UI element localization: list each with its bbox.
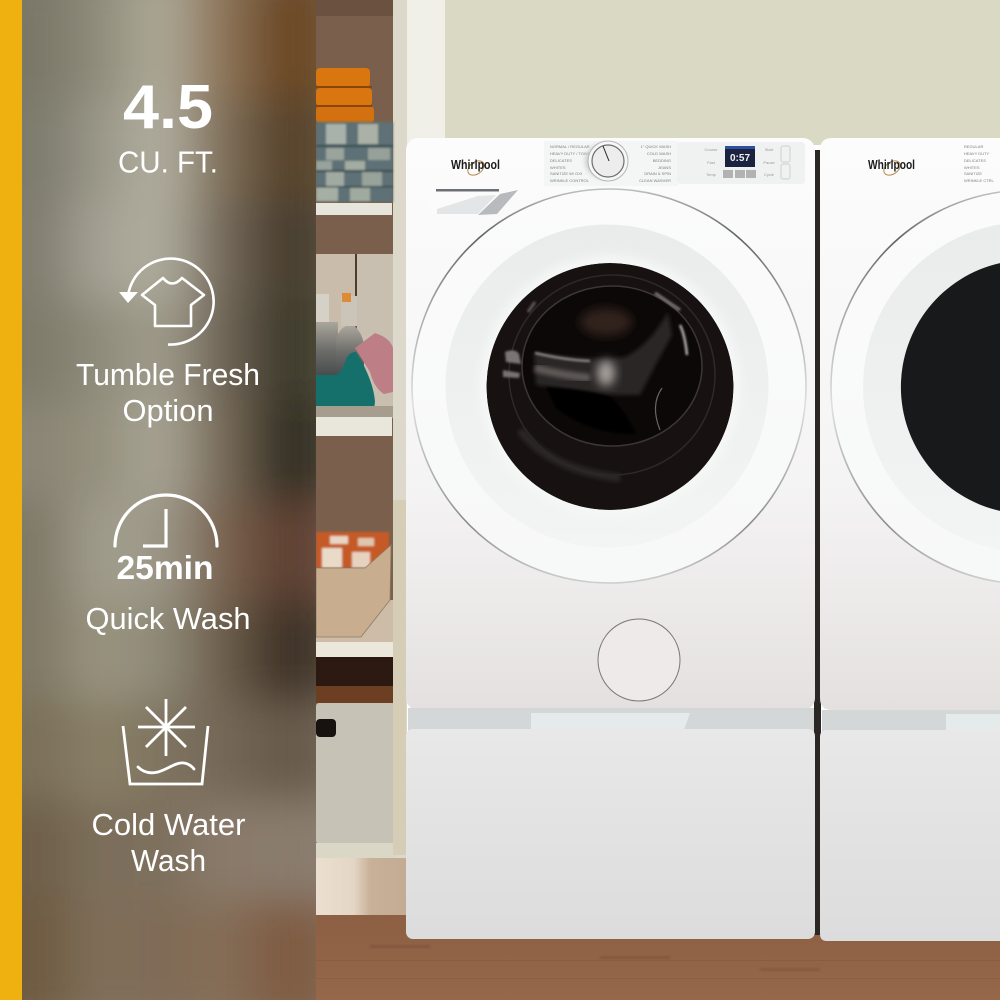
option labels: Temp [706,172,717,177]
washer body [406,138,815,710]
orange towels [316,68,374,123]
beige bin [316,545,391,637]
dark gap [316,657,393,703]
wood floor [316,915,1000,1000]
icon: half clock [115,495,217,546]
shelf two [316,406,393,418]
door glass and drum [486,263,734,510]
icon value: 25min [116,549,214,586]
icon: shirt with rotating arrow [119,259,214,345]
capacity value: 4.5 [123,73,213,142]
option labels: Pause [763,160,775,165]
shelf three top surface [316,600,393,642]
yellow stripe [0,0,22,1000]
option labels [705,147,775,177]
orange patterned towels [316,532,389,568]
power buttons [781,146,790,179]
wall [445,0,1000,145]
washer [406,138,815,710]
option buttons [723,170,756,178]
dryer cycle labels [964,144,995,183]
capacity unit: CU. FT. [118,144,218,180]
teal basket [316,352,375,417]
whirlpool logo: Whirlpool [451,158,500,172]
cycle labels left: HEAVY DUTY / TOWELS [550,151,596,156]
cycle dial [585,141,628,181]
washer pedestal [406,708,815,939]
whirlpool logo [451,158,500,178]
pink cloth [355,333,393,394]
door trim [393,0,445,145]
shelf three [316,642,393,657]
dryer body [820,138,1000,710]
cycle labels right: BEDDING [653,158,671,163]
feature: tumble fresh: Option [122,393,214,428]
frosted feature panel [22,0,316,1000]
dryer cycle labels: SANITIZE [964,171,982,176]
cycle labels right: COLD WASH [647,151,671,156]
dryer logo [868,158,915,178]
cycle labels right: 1" QUICK WASH [641,144,671,149]
shelf one [316,203,392,215]
shelf four [316,843,396,858]
dryer cycle labels: DELICATES [964,158,986,163]
cycle labels right: DRAIN & SPIN [644,171,671,176]
cycle labels left: NORMAL / REGULAR [550,144,590,149]
cycle labels left: WRINKLE CONTROL [550,178,590,183]
control panel [451,141,805,186]
dryer cycle labels: HEAVY DUTY [964,151,990,156]
feature: cold water wash: Wash [131,843,206,878]
dryer door [831,192,1000,582]
dryer logo: Whirlpool [868,158,915,172]
dryer cycle labels: REGULAR [964,144,983,149]
detergent drawer [420,187,518,215]
dryer cycle labels: WHITES [964,165,980,170]
feature: tumble fresh [76,259,260,428]
shelving unit [316,0,406,915]
cycle labels right: JEANS [658,165,671,170]
gap between machines [814,150,821,935]
dryer cycle labels: WRINKLE CTRL [964,178,995,183]
option labels: Course [705,147,718,152]
door assembly [412,189,806,583]
drain access cover [598,619,680,701]
label: Cold Water [92,807,246,842]
dryer pedestal [820,710,1000,941]
bin handle [316,719,336,737]
option labels: Fast [707,160,716,165]
baseboard [316,858,406,915]
label: Tumble Fresh [76,357,260,392]
capacity stat [118,73,218,180]
feature: cold water wash [92,699,246,878]
spray bottles [316,293,364,378]
paper towel rolls [316,254,393,409]
blurred panel background [22,0,316,1000]
grey storage bin [316,703,395,844]
option labels: Start [765,147,774,152]
label: Quick Wash [86,601,250,636]
display screen: 0:57 [730,153,750,164]
feature: quick wash [86,495,250,636]
cycle labels left: WHITES [550,165,566,170]
cycle labels right: CLEAN WASHER [639,178,671,183]
option labels: Cycle [764,172,775,177]
trim post [393,0,407,915]
dryer [820,138,1000,941]
cycle labels left: SANITIZE W/ OXI [550,171,582,176]
cycle labels left: DELICATES [550,158,572,163]
icon: tub with snowflake [123,699,208,784]
cycle labels left [550,144,596,183]
checkered towels [316,122,393,202]
display screen [725,146,755,167]
photo: laundry room scene [316,0,1000,1000]
cycle labels right [639,144,671,183]
